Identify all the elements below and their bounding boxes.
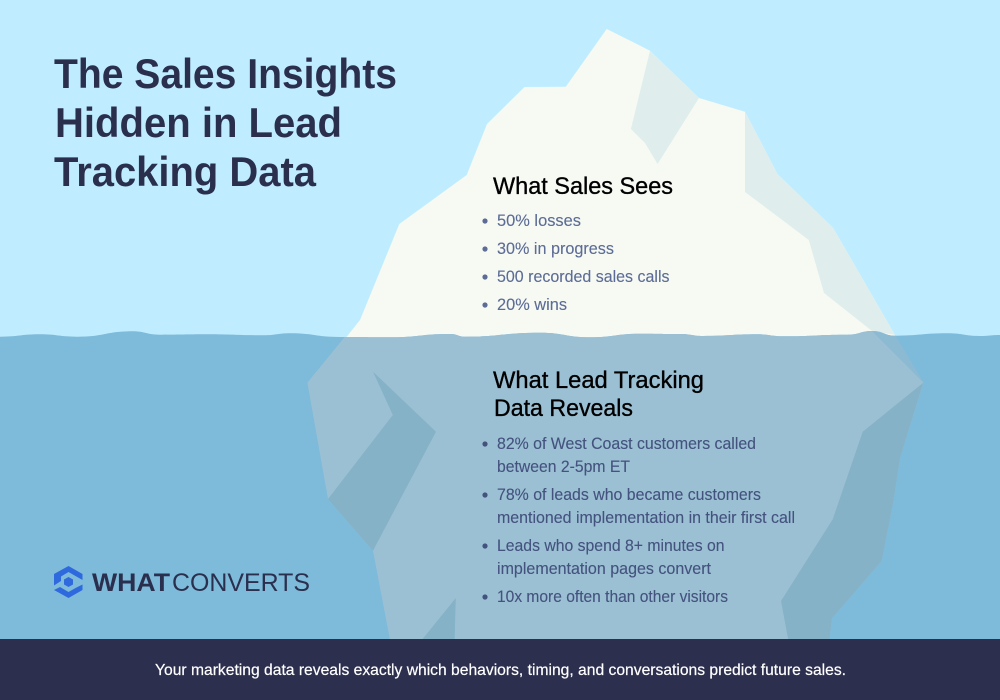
list: what lead tracking data reveals: [482, 435, 795, 606]
wordmark: [92, 569, 310, 597]
list: what lead tracking data reveals: Leads who spend 8+ minutes on: [497, 537, 724, 555]
heading: what lead tracking data reveals: Data Reveals: [494, 395, 633, 422]
list: what sales sees: 20% wins: [497, 296, 567, 314]
footer bar: [0, 639, 1000, 700]
list: what lead tracking data reveals: 82% of West Coast customers called: [497, 435, 756, 453]
footer bar: Your marketing data reveals exactly which behaviors, timing, and conversations predict future sales.: [155, 662, 846, 679]
list: what sales sees: 30% in progress: [497, 240, 614, 258]
list: what lead tracking data reveals: between 2-5pm ET: [497, 458, 630, 476]
wordmark: CONVERTS: [172, 569, 310, 597]
list: what lead tracking data reveals: mentioned implementation in their first call: [497, 509, 795, 527]
title: The Sales Insights: [54, 50, 397, 97]
list: what lead tracking data reveals: 10x more often than other visitors: [497, 588, 728, 606]
title: Tracking Data: [54, 148, 317, 195]
iceberg below water: [307, 328, 923, 640]
icon: hexagon logo mark: [54, 566, 82, 598]
water: [0, 331, 1000, 640]
title: Hidden in Lead: [55, 99, 342, 146]
heading: what lead tracking data reveals: What Lead Tracking: [493, 367, 704, 394]
list: what sales sees: 500 recorded sales calls: [497, 268, 670, 286]
heading: what sales sees: What Sales Sees: [493, 173, 673, 200]
sky background: [0, 0, 1000, 345]
title: [54, 50, 397, 195]
logo: whatconverts: [54, 566, 310, 598]
list: what sales sees: 50% losses: [497, 212, 581, 230]
list: what sales sees: [482, 212, 670, 314]
wordmark: WHAT: [92, 569, 170, 597]
list: what lead tracking data reveals: 78% of leads who became customers: [497, 486, 761, 504]
list: what lead tracking data reveals: implementation pages convert: [497, 560, 711, 578]
iceberg above water: [346, 29, 895, 345]
heading: what lead tracking data reveals: [493, 367, 704, 422]
